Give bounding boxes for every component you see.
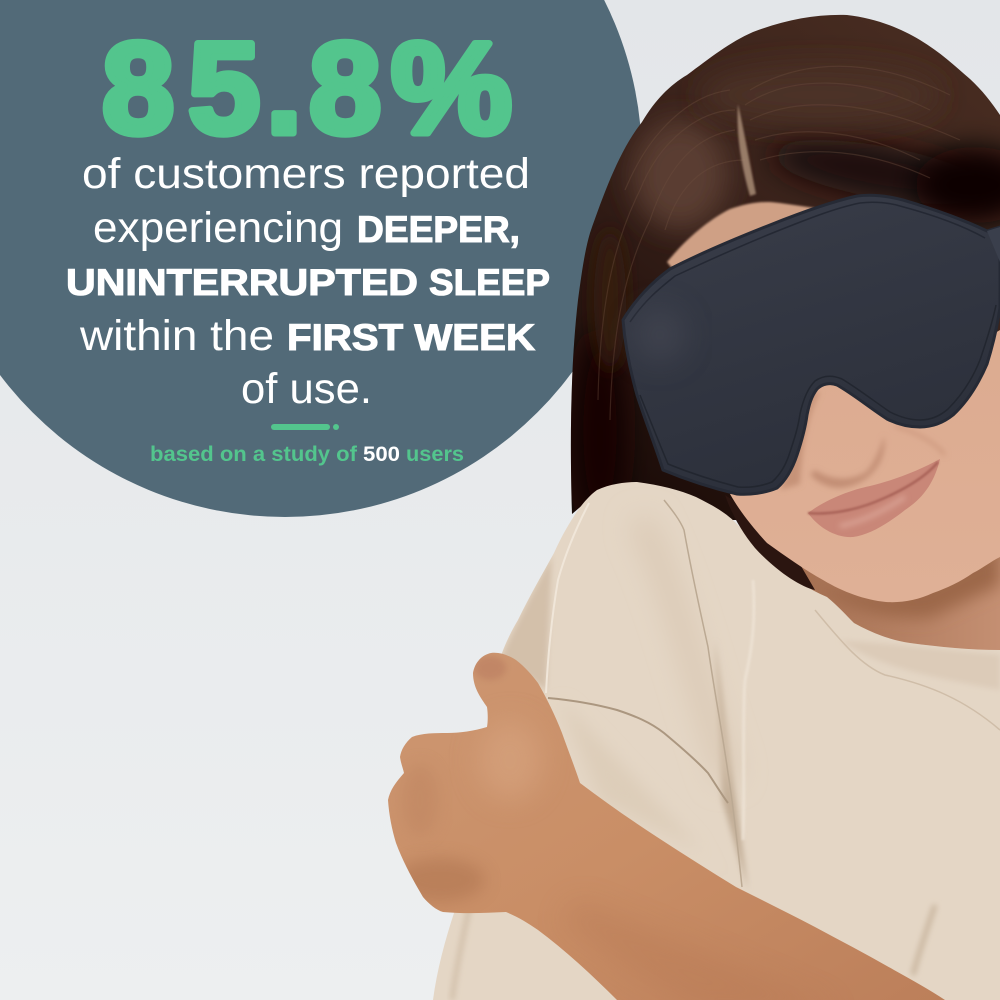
lips [808, 459, 940, 537]
text block: study source: based on a study of [150, 443, 358, 466]
text block: statistic description: SLEEP [429, 262, 550, 303]
text block: statistic description: of customers reported [82, 150, 530, 198]
headline: 85.8% [102, 15, 512, 161]
accent divider: bar and dot [271, 424, 339, 430]
text block: study source [150, 443, 464, 466]
text block: statistic description: within the [79, 312, 274, 360]
headline: 85.8%: . [266, 15, 302, 161]
photo: woman wearing sleep mask [388, 15, 1000, 1000]
text block: study source: users [406, 443, 464, 466]
neck [760, 500, 1000, 670]
text block: statistic description: FIRST WEEK [287, 317, 535, 358]
arm and hand [388, 653, 945, 1000]
headline: 85.8%: % [391, 15, 512, 161]
headline: 85.8%: 85 [102, 15, 260, 161]
text block: statistic description: of use. [241, 365, 372, 413]
nose shadow [810, 436, 885, 488]
text block: statistic description: experiencing [93, 204, 343, 252]
headline: 85.8%: 8 [309, 15, 381, 161]
shirt shading and folds [452, 500, 1000, 1000]
smile crease [895, 426, 945, 455]
hair [571, 15, 1000, 530]
hair parting [738, 104, 756, 196]
text block: statistic description [66, 150, 550, 413]
panel: statistic circle [0, 0, 642, 517]
text block: study source: 500 [363, 443, 400, 466]
shirt [433, 482, 1000, 1000]
text block: statistic description: DEEPER, [357, 209, 520, 250]
forehead skin [667, 202, 815, 272]
sleep mask [623, 195, 1000, 494]
text block: statistic description: UNINTERRUPTED [66, 262, 418, 303]
strand of hair at jaw [725, 495, 815, 590]
lower face [730, 330, 1000, 602]
